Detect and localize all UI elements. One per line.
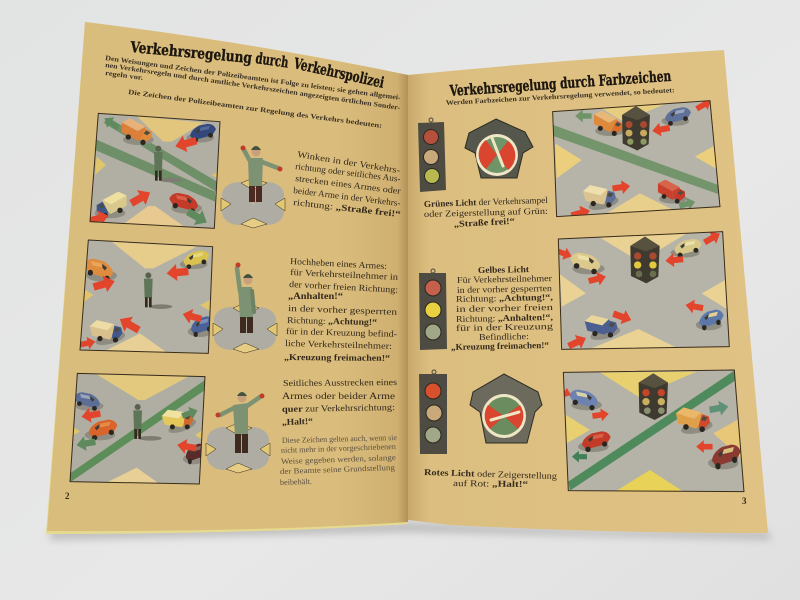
street scene 2: raised arm (78, 240, 214, 353)
text: red (424, 467, 558, 489)
left page (46, 22, 408, 534)
traffic light: yellow (419, 269, 447, 350)
text: waving: richtung oder seitliches Aus- (295, 161, 401, 184)
text: raised arm: Hochheben eines Armes: (290, 256, 387, 271)
left page title (129, 38, 386, 92)
text: note: der Beamte seine Grundstellung (280, 463, 395, 476)
policeman figure 3: arms out (206, 392, 270, 473)
text: yellow: in der vorher gesperrten (457, 283, 553, 295)
policeman figure 2: raised arm (213, 262, 277, 353)
intro text: nen Verkehrsregeln und durch amtliche Verkehrszeichen angezeigten örtlichen Sonder- (105, 61, 401, 112)
traffic light: red (419, 370, 447, 454)
text: raised arm: für Verkehrsteilnehmer in (290, 267, 399, 282)
right page subtitle: Werden Farbzeichen zur Verkehrsregelung verwendet, so bedeutet: (446, 86, 675, 107)
text: arms out: Seitliches Ausstrecken eines (283, 377, 398, 388)
traffic light: green (418, 118, 446, 192)
text: yellow: Für Verkehrsteilnehmer (457, 273, 552, 285)
text: raised arm: Richtung: „Achtung!“ (287, 315, 378, 327)
policeman figure 1: waving (221, 146, 285, 228)
text: note: beibehält. (280, 477, 312, 487)
street scene 5: yellow light (554, 228, 729, 353)
street scene 3: arms across (70, 373, 206, 484)
text: raised arm: der vorher freien Richtung: (289, 279, 398, 295)
text: red: auf Rot: „Halt!“ (453, 478, 529, 489)
page number 2: 2 (65, 491, 70, 501)
left page title: Verkehrsregelung (129, 38, 253, 67)
text: green: oder Zeigerstellung auf Grün: (424, 206, 548, 219)
text: waving: strecken eines Armes oder (295, 173, 401, 196)
text: waving: Winken in der Verkehrs- (297, 149, 401, 175)
text: yellow: für in der Kreuzung (456, 321, 554, 333)
intro text (105, 54, 402, 130)
right page (408, 50, 768, 533)
text: arms out: „Halt!“ (282, 416, 314, 427)
text: yellow: „Kreuzung freimachen!“ (451, 340, 550, 352)
street scene 4: green light (553, 95, 720, 223)
text: raised arm: liche Verkehrsteilnehmer: (285, 338, 392, 351)
text: green: „Straße frei!“ (454, 216, 516, 229)
street scene 6: red light (556, 370, 744, 492)
text: raised arm (284, 256, 399, 363)
text: green: Grünes Licht der Verkehrsampel (424, 195, 549, 209)
intro text: Den Weisungen und Zeichen der Polizeibeamten ist Folge zu leisten; sie gehen allgemei- (105, 54, 402, 102)
text: yellow (451, 264, 554, 352)
text: red: Rotes Licht oder Zeigerstellung (424, 467, 558, 481)
text: yellow: in der vorher freien (456, 302, 554, 314)
intro text: Die Zeichen der Polizeibeamten zur Regelung des Verkehrs bedeuten: (128, 88, 383, 130)
text: green (424, 195, 549, 229)
signal disc: green (465, 119, 533, 178)
text: waving (293, 149, 402, 219)
intro text: regeln vor. (105, 69, 144, 82)
text: arms out: quer zur Verkehrsrichtung: (282, 402, 395, 414)
text: raised arm: „Kreuzung freimachen!“ (284, 352, 391, 363)
text: note (280, 433, 397, 487)
text: note: Weise gegeben werden, solange (281, 453, 397, 466)
text: waving: richtung: „Straße frei!“ (293, 197, 402, 219)
text: yellow: Richtung: „Anhalten!“, (456, 312, 553, 324)
text: arms out (282, 377, 398, 427)
left page title: Verkehrspolizei (291, 54, 386, 92)
text: arms out: Armes oder beider Arme (282, 391, 395, 401)
text: note: nicht mehr in der vorgeschriebenen (281, 442, 396, 455)
text: waving: beider Arme in der Verkehrs- (293, 185, 401, 208)
text: yellow: Gelbes Licht (478, 264, 529, 275)
signal disc: red (470, 374, 542, 443)
text: raised arm: „Anhalten!“ (288, 291, 344, 301)
text: raised arm: in der vorher gesperrten (288, 303, 398, 317)
text: raised arm: für in der Kreuzung befind- (286, 326, 397, 339)
left page title: durch (254, 49, 290, 72)
street scene 1: waving policeman (88, 113, 220, 230)
text: note: Diese Zeichen gelten auch, wenn sie (282, 433, 397, 445)
right page title: Verkehrsregelung durch Farbzeichen (448, 67, 672, 100)
page number 3: 3 (742, 496, 747, 506)
text: yellow: Befindliche: (479, 331, 529, 342)
text: yellow: Richtung: „Achtung!“, (456, 292, 553, 304)
